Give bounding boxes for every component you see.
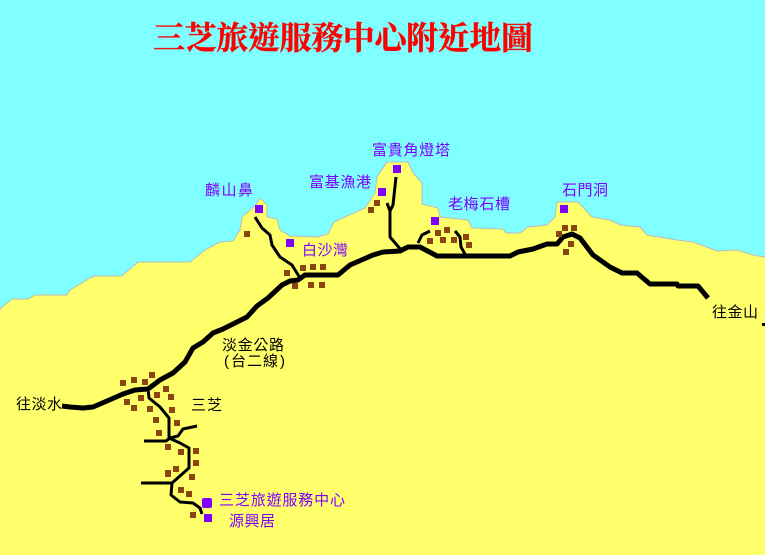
edge mark bbox=[762, 323, 765, 326]
place labels: 白沙灣 bbox=[302, 242, 348, 259]
road and town labels: (台二線) bbox=[224, 353, 285, 370]
road and town labels: 三芝 bbox=[191, 397, 222, 414]
road and town labels: 往金山 bbox=[712, 304, 758, 321]
place labels: 富貴角燈塔 bbox=[372, 141, 450, 159]
main road: Danjin Highway bbox=[62, 234, 708, 408]
road and town labels: 淡金公路 bbox=[222, 337, 284, 354]
land with coastline bbox=[0, 162, 765, 555]
place labels: 石門洞 bbox=[562, 182, 608, 199]
road and town labels: 往淡水 bbox=[16, 396, 62, 413]
place labels: 麟山鼻 bbox=[205, 182, 253, 199]
title: 三芝旅遊服務中心附近地圖 bbox=[153, 20, 533, 56]
marker: Yuanxing residence bbox=[204, 514, 212, 522]
marker: Sanzhi visitor center bbox=[202, 498, 212, 508]
branch roads bbox=[141, 177, 465, 514]
road and town labels bbox=[16, 304, 758, 414]
place labels: 富基漁港 bbox=[309, 173, 371, 191]
place labels: 老梅石槽 bbox=[448, 196, 510, 213]
attraction markers bbox=[255, 165, 568, 247]
place labels: 三芝旅遊服務中心 bbox=[219, 492, 345, 509]
place labels bbox=[205, 141, 608, 530]
place labels: 源興居 bbox=[229, 513, 275, 530]
village houses bbox=[120, 200, 577, 518]
